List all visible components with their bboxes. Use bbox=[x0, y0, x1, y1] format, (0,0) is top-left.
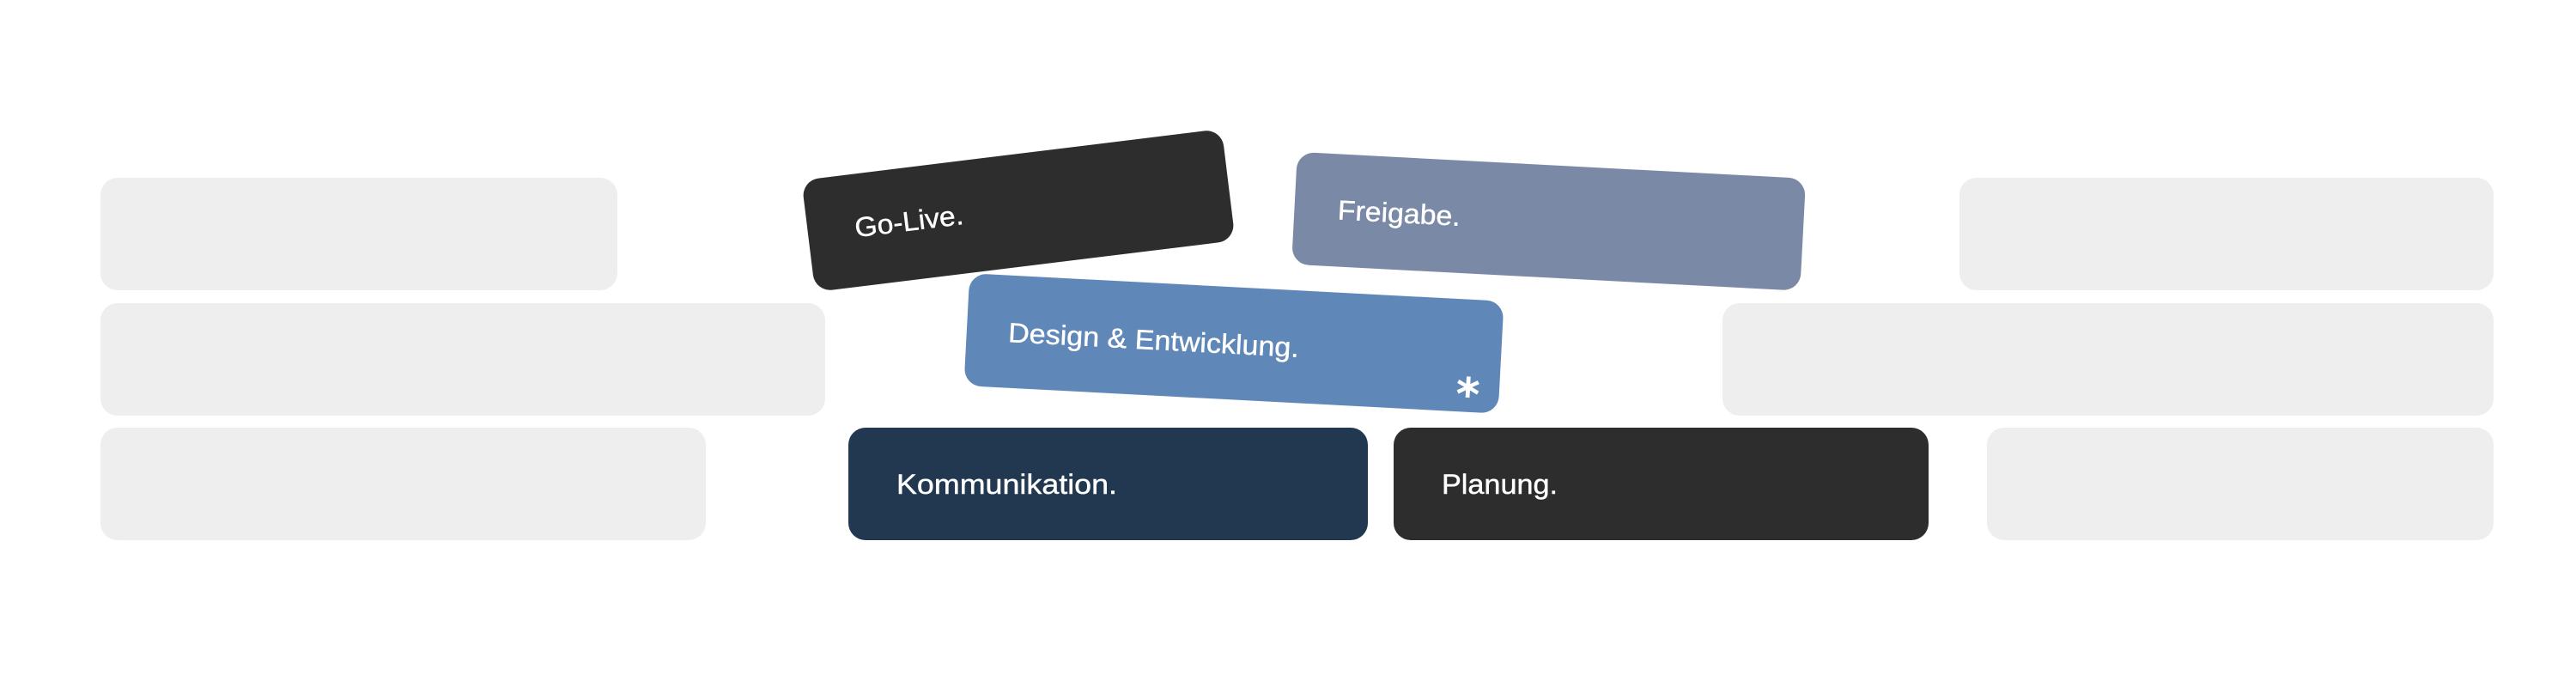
panel: right placeholder row 1 bbox=[1959, 178, 2494, 290]
panel: left placeholder row 1 bbox=[100, 178, 617, 290]
label: Freigabe: Freigabe. bbox=[1337, 194, 1461, 232]
label: Go-Live: Go-Live. bbox=[853, 199, 965, 243]
label: Planung: Planung. bbox=[1442, 469, 1558, 500]
label: Kommunikation: Kommunikation. bbox=[896, 469, 1117, 500]
panel: right placeholder row 3 bbox=[1987, 428, 2494, 540]
card: Planung bbox=[1394, 428, 1929, 540]
card: Freigabe bbox=[1291, 152, 1806, 291]
card: Go-Live bbox=[801, 129, 1236, 292]
label: Design & Entwicklung: Design & Entwicklung. bbox=[1007, 317, 1300, 363]
panel: right placeholder row 2 bbox=[1722, 303, 2494, 416]
card: Design & Entwicklung bbox=[963, 273, 1504, 423]
icon: asterisk: * bbox=[1455, 369, 1480, 422]
panel: left placeholder row 3 bbox=[100, 428, 706, 540]
card: Kommunikation bbox=[848, 428, 1368, 540]
panel: left placeholder row 2 bbox=[100, 303, 825, 416]
